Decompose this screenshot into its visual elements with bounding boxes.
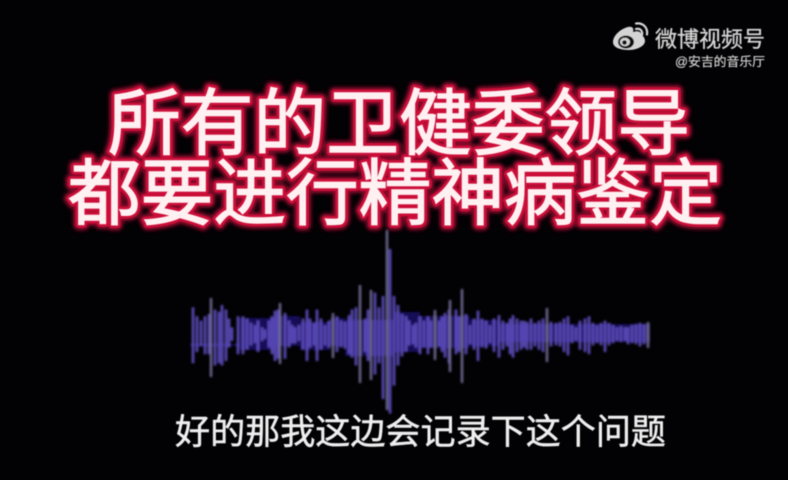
icon: Weibo eye logo — [613, 23, 647, 50]
title white text — [68, 84, 722, 235]
waveform body in dark indigo — [190, 312, 650, 356]
Weibo video wordmark: 微博视频号 — [655, 27, 765, 52]
account handle: @安吉的音乐厅 — [675, 54, 765, 69]
title: two-line white text with red glow — [68, 84, 722, 235]
title red outline: 所有的卫健委领导 — [108, 84, 690, 165]
waveform purple bars — [193, 249, 644, 414]
title white text: 都要进行精神病鉴定 — [68, 154, 722, 235]
waveform grey spikes — [211, 230, 648, 410]
title red outline: 都要进行精神病鉴定 — [68, 154, 722, 235]
audio waveform — [190, 230, 650, 414]
title glow: 所有的卫健委领导 — [108, 84, 690, 165]
title white text: 所有的卫健委领导 — [108, 84, 690, 165]
watermark: Weibo video logo and account — [613, 23, 765, 69]
title glow: 都要进行精神病鉴定 — [68, 154, 722, 235]
caption subtitle: 好的那我这边会记录下这个问题 — [175, 413, 666, 452]
title red outline — [68, 84, 722, 235]
title glow — [68, 84, 722, 235]
